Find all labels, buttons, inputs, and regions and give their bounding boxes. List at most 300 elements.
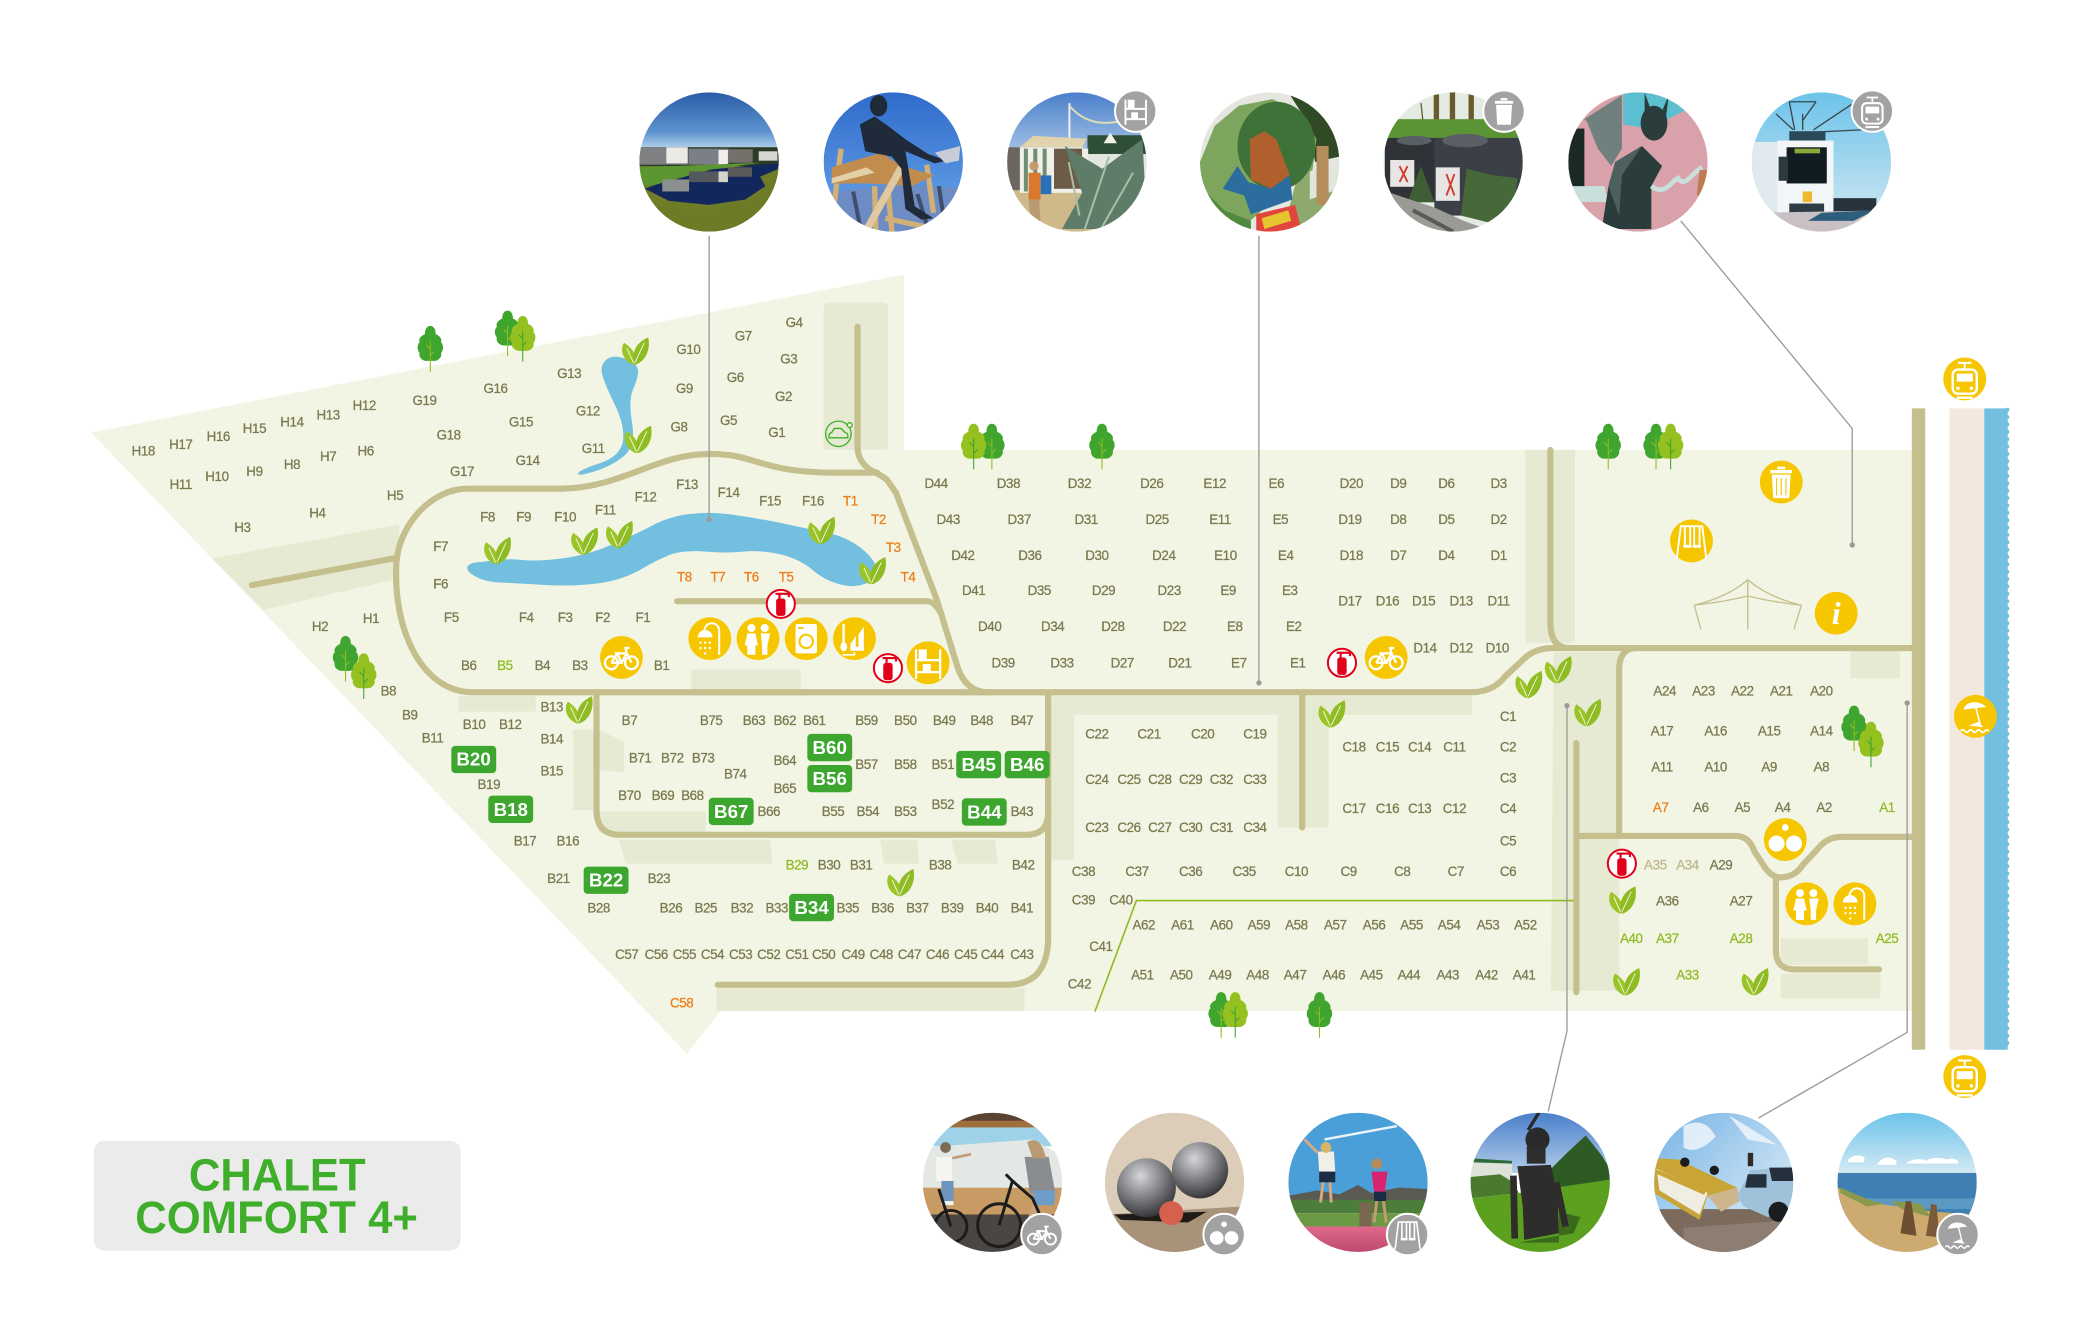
plot labels: F and T rows: T8 bbox=[677, 570, 692, 585]
plot labels: F and T rows: F14 bbox=[718, 485, 740, 500]
photo: players on trampoline bbox=[1288, 1113, 1428, 1252]
plot labels: D and E rows: E3 bbox=[1282, 583, 1298, 598]
map pointer lines bbox=[707, 221, 1909, 1118]
plot labels: D and E rows: E9 bbox=[1220, 583, 1236, 598]
title: chalet comfort 4+: CHALET bbox=[189, 1149, 366, 1200]
plot labels: D and E rows: D42 bbox=[951, 548, 975, 563]
plot labels: B row: B40 bbox=[976, 900, 998, 915]
plot labels: F and T rows: T7 bbox=[710, 570, 725, 585]
plot labels: A row: A50 bbox=[1170, 967, 1193, 982]
plot labels: B row: B75 bbox=[700, 713, 722, 728]
plot labels: C row: C12 bbox=[1443, 801, 1466, 816]
icon: tram stop north bbox=[1943, 358, 1986, 400]
plot labels: G row: G3 bbox=[780, 351, 797, 366]
plot labels: B row: B59 bbox=[855, 713, 878, 728]
plot labels: A row: A11 bbox=[1651, 760, 1673, 775]
plot labels: B row: B71 bbox=[629, 750, 651, 765]
plot labels: C row: C54 bbox=[701, 947, 725, 962]
plot labels: D and E rows: E1 bbox=[1290, 655, 1306, 670]
plot labels: A row: A28 bbox=[1730, 931, 1752, 946]
plot labels: H row bbox=[132, 398, 403, 634]
plot labels: H row: H11 bbox=[170, 477, 192, 492]
plot labels: B row: B3 bbox=[572, 658, 588, 673]
title: chalet comfort 4+: COMFORT 4+ bbox=[135, 1192, 418, 1243]
plot labels: A row: A5 bbox=[1735, 800, 1750, 815]
plot labels: G row: G15 bbox=[509, 414, 533, 429]
plot labels: B row: B42 bbox=[1012, 857, 1035, 872]
plot labels: F and T rows: F5 bbox=[444, 610, 459, 625]
plot labels: B row: B49 bbox=[933, 713, 955, 728]
panel: lakes bbox=[467, 357, 877, 586]
plot labels: F and T rows: F6 bbox=[433, 576, 448, 591]
photo: caravans by the pond bbox=[640, 92, 779, 232]
plot labels: D and E rows: D13 bbox=[1449, 594, 1473, 609]
plot labels: C row: C45 bbox=[954, 947, 977, 962]
plot labels: C row: C44 bbox=[981, 947, 1005, 962]
plot labels: D and E rows: D43 bbox=[937, 512, 960, 527]
plot labels: B row: B32 bbox=[731, 900, 753, 915]
icon: bike rental east bbox=[1365, 636, 1408, 679]
plot labels: D and E rows: D44 bbox=[924, 476, 949, 491]
plot labels: D and E rows: E12 bbox=[1203, 476, 1226, 491]
plot labels: G row: G13 bbox=[557, 366, 581, 381]
plot labels: B row bbox=[381, 658, 1035, 915]
plot labels: D and E rows: D15 bbox=[1412, 594, 1435, 609]
photo: squirrel mural bbox=[1568, 92, 1708, 232]
plot labels: B row: B12 bbox=[499, 717, 522, 732]
plot labels: G row: G1 bbox=[768, 425, 785, 440]
plot labels: B row: B5 bbox=[497, 658, 513, 673]
plot labels: B row: B15 bbox=[540, 764, 563, 779]
plot labels: C row: C47 bbox=[898, 947, 921, 962]
plot labels: A row: A22 bbox=[1731, 683, 1754, 698]
plot labels: D and E rows: D27 bbox=[1111, 655, 1134, 670]
plot labels: A row: A24 bbox=[1653, 683, 1677, 698]
plot labels: D and E rows: D36 bbox=[1018, 548, 1042, 563]
plot labels: C row bbox=[615, 709, 1517, 1010]
plot labels: F and T rows bbox=[433, 477, 916, 625]
plot labels: C row: C16 bbox=[1376, 801, 1399, 816]
plot labels: C row: C39 bbox=[1072, 892, 1095, 907]
plot labels: H row: H17 bbox=[169, 437, 192, 452]
highlighted chalet plots: B22 bbox=[589, 870, 623, 891]
plot labels: C row: C22 bbox=[1085, 726, 1109, 741]
green boundary line bbox=[1095, 901, 1574, 1012]
plot labels: C row: C4 bbox=[1500, 801, 1517, 816]
plot labels: D and E rows: E8 bbox=[1227, 619, 1243, 634]
plot labels: A row: A23 bbox=[1692, 683, 1715, 698]
plot labels: D and E rows: D24 bbox=[1152, 548, 1176, 563]
highlighted chalet plots: B44 bbox=[967, 801, 1002, 822]
plot labels: D and E rows: D14 bbox=[1413, 641, 1438, 656]
plot labels: H row: H7 bbox=[320, 449, 336, 464]
panel: campsite land bbox=[91, 274, 1913, 1054]
plot labels: A row: A25 bbox=[1876, 931, 1898, 946]
plot labels: C row: C1 bbox=[1500, 709, 1516, 724]
plot labels: D and E rows: D41 bbox=[962, 583, 985, 598]
plot labels: B row: B36 bbox=[871, 900, 894, 915]
plot labels: F and T rows: F4 bbox=[519, 610, 535, 625]
plot labels: C row: C20 bbox=[1191, 726, 1214, 741]
badge: swing bbox=[1387, 1214, 1428, 1255]
plot labels: D and E rows: D10 bbox=[1486, 641, 1509, 656]
plot labels: C row: C27 bbox=[1148, 820, 1171, 835]
plot labels: C row: C37 bbox=[1125, 864, 1149, 879]
plot labels: D and E rows: D7 bbox=[1390, 548, 1406, 563]
plot labels: B row: B53 bbox=[894, 804, 917, 819]
icon: tram stop south bbox=[1943, 1055, 1986, 1098]
plot labels: B row: B74 bbox=[724, 766, 748, 781]
plot labels: A row: A49 bbox=[1209, 967, 1231, 982]
plot labels: D and E rows: D1 bbox=[1491, 548, 1507, 563]
plot labels: G row: G9 bbox=[676, 381, 693, 396]
plot labels: B row: B73 bbox=[692, 750, 714, 765]
plot labels: C row: C56 bbox=[645, 947, 668, 962]
plot labels: A row: A60 bbox=[1210, 918, 1233, 933]
plot labels: G row: G14 bbox=[516, 453, 541, 468]
plot labels: C row: C17 bbox=[1342, 801, 1366, 816]
plot labels: F and T rows: T2 bbox=[871, 512, 886, 527]
plot labels: C row: C3 bbox=[1500, 770, 1516, 785]
plot labels: D and E rows: D25 bbox=[1145, 512, 1169, 527]
plot labels: D and E rows: D17 bbox=[1338, 594, 1362, 609]
plot labels: A row: A52 bbox=[1514, 918, 1537, 933]
highlighted chalet plots: B46 bbox=[1010, 754, 1044, 775]
plot labels: B row: B52 bbox=[932, 797, 954, 812]
plot labels: A row: A42 bbox=[1475, 967, 1498, 982]
plot labels: B row: B69 bbox=[652, 788, 674, 803]
plot labels: B row: B68 bbox=[681, 788, 704, 803]
photo: beach cabin bbox=[1007, 92, 1146, 232]
plot labels: B row: B10 bbox=[463, 717, 485, 732]
plot labels: H row: H12 bbox=[353, 398, 376, 413]
plot labels: B row: B58 bbox=[894, 757, 917, 772]
plot labels: D and E rows: D32 bbox=[1068, 476, 1091, 491]
plot labels: C row: C2 bbox=[1500, 740, 1516, 755]
plot labels: C row: C53 bbox=[729, 947, 752, 962]
highlighted chalet plots: B18 bbox=[494, 799, 528, 820]
plot labels: C row: C28 bbox=[1148, 772, 1171, 787]
highlighted chalet plots: B56 bbox=[812, 768, 847, 789]
plot labels: C row: C48 bbox=[870, 947, 893, 962]
icon: toilets bbox=[737, 617, 779, 660]
plot labels: H row: H15 bbox=[243, 421, 266, 436]
plot labels: H row: H16 bbox=[207, 429, 230, 444]
icon: dishwashing bbox=[833, 617, 876, 660]
photo: recycling bins bbox=[1383, 92, 1523, 232]
icon: bike rental bbox=[600, 636, 643, 679]
plot labels: D and E rows: D20 bbox=[1340, 476, 1363, 491]
plot labels: C row: C33 bbox=[1243, 772, 1267, 787]
plot labels: H row: H8 bbox=[284, 457, 300, 472]
icon: playground swing bbox=[1670, 520, 1713, 562]
plot labels: C row: C19 bbox=[1243, 726, 1267, 741]
plot labels: D and E rows: D30 bbox=[1085, 548, 1109, 563]
icon: beach bbox=[1954, 695, 1997, 738]
plot labels: B row: B23 bbox=[648, 871, 670, 886]
plot labels: B row: B55 bbox=[822, 804, 844, 819]
badge: tram bbox=[1852, 90, 1893, 132]
photo: bronze statue on lawn bbox=[1471, 1113, 1610, 1252]
plot labels: D and E rows: E11 bbox=[1209, 512, 1231, 527]
plot labels: C row: C57 bbox=[615, 947, 638, 962]
plot labels: C row: C6 bbox=[1500, 864, 1516, 879]
plot labels: B row: B13 bbox=[540, 699, 563, 714]
plot labels: F and T rows: T1 bbox=[843, 493, 858, 508]
photo: cyclists at map bbox=[923, 1113, 1062, 1252]
plot labels: F and T rows: T3 bbox=[886, 540, 901, 555]
plot labels: B row: B14 bbox=[540, 732, 564, 747]
leaf markers bbox=[484, 337, 1769, 996]
plot labels: D and E rows: D19 bbox=[1338, 512, 1362, 527]
plot labels: A row: A44 bbox=[1398, 967, 1421, 982]
plot labels: F and T rows: T5 bbox=[779, 570, 794, 585]
plot labels: F and T rows: F10 bbox=[554, 509, 576, 524]
icon: bunk bed bbox=[907, 641, 950, 684]
badge: beach bbox=[1937, 1214, 1979, 1255]
plot labels: B row: B29 bbox=[786, 857, 808, 872]
plot labels: C row: C18 bbox=[1342, 740, 1366, 755]
plot labels: C row: C5 bbox=[1500, 833, 1516, 848]
plot labels: D and E rows: D3 bbox=[1491, 476, 1507, 491]
plot labels: D and E rows: D21 bbox=[1168, 655, 1192, 670]
plot labels: B row: B33 bbox=[765, 900, 788, 915]
plot labels: C row: C40 bbox=[1109, 892, 1133, 907]
plot labels: F and T rows: F7 bbox=[433, 539, 448, 554]
plot labels: B row: B47 bbox=[1011, 713, 1033, 728]
plot labels: G row bbox=[413, 315, 804, 479]
plot labels: A row: A59 bbox=[1248, 918, 1270, 933]
plot labels: F and T rows: F13 bbox=[676, 477, 698, 492]
plot labels: A row: A48 bbox=[1246, 967, 1269, 982]
plot labels: D and E rows: D38 bbox=[997, 476, 1020, 491]
plot labels: D and E rows: E7 bbox=[1231, 655, 1247, 670]
plot labels: A row: A35 bbox=[1644, 857, 1667, 872]
plot labels: B row: B64 bbox=[774, 753, 797, 768]
plot labels: A row: A29 bbox=[1710, 857, 1732, 872]
plot labels: C row: C34 bbox=[1243, 820, 1268, 835]
highlighted chalet plots: B67 bbox=[714, 801, 748, 822]
plot labels: A row: A16 bbox=[1704, 724, 1727, 739]
plot labels: A row: A62 bbox=[1132, 918, 1155, 933]
plot labels: D and E rows: D28 bbox=[1101, 619, 1125, 634]
plot labels: A row: A43 bbox=[1436, 967, 1459, 982]
plot labels: C row: C8 bbox=[1394, 864, 1410, 879]
plot labels: C row: C51 bbox=[785, 947, 809, 962]
plot labels: C row: C38 bbox=[1072, 864, 1095, 879]
plot labels: H row: H2 bbox=[312, 619, 328, 634]
plot labels: A row: A56 bbox=[1363, 918, 1385, 933]
plot labels: C row: C46 bbox=[926, 947, 949, 962]
plot labels: A row: A33 bbox=[1676, 967, 1699, 982]
plot labels: G row: G10 bbox=[676, 342, 700, 357]
plot labels: F and T rows: F2 bbox=[595, 610, 610, 625]
plot labels: F and T rows: F9 bbox=[516, 509, 531, 524]
plot labels: A row: A4 bbox=[1775, 800, 1791, 815]
plot labels: B row: B41 bbox=[1011, 900, 1033, 915]
plot labels: A row: A55 bbox=[1400, 918, 1423, 933]
plot labels: H row: H3 bbox=[234, 520, 251, 535]
plot labels: C row: C52 bbox=[757, 947, 780, 962]
plot labels: H row: H4 bbox=[309, 505, 327, 520]
plot labels: B row: B50 bbox=[894, 713, 917, 728]
plot labels: H row: H13 bbox=[316, 408, 340, 423]
plot labels: G row: G6 bbox=[727, 370, 744, 385]
plot labels: G row: G17 bbox=[450, 464, 474, 479]
plot labels: H row: H9 bbox=[246, 464, 263, 479]
plot labels: C row: C15 bbox=[1376, 740, 1399, 755]
plot labels: A row bbox=[1131, 683, 1898, 982]
plot labels: C row: C24 bbox=[1085, 772, 1109, 787]
plot labels: A row: A17 bbox=[1651, 724, 1673, 739]
plot labels: B row: B62 bbox=[774, 713, 796, 728]
plot labels: A row: A54 bbox=[1438, 918, 1461, 933]
plot labels: D and E rows: D33 bbox=[1050, 655, 1074, 670]
plot labels: G row: G12 bbox=[576, 404, 600, 419]
panel: beach and sea strip bbox=[1949, 408, 2008, 1050]
plot labels: C row: C7 bbox=[1448, 864, 1464, 879]
icon: shower east bbox=[1833, 882, 1876, 925]
plot labels: A row: A47 bbox=[1284, 967, 1306, 982]
plot labels: B row: B35 bbox=[836, 900, 859, 915]
photo: dunes and sea bbox=[1838, 1113, 1977, 1252]
plot labels: B row: B30 bbox=[818, 857, 840, 872]
icon: information: i bbox=[1832, 595, 1841, 631]
plot labels: D and E rows: D22 bbox=[1163, 619, 1186, 634]
plot labels: B row: B4 bbox=[535, 658, 551, 673]
plot labels: F and T rows: F1 bbox=[635, 610, 650, 625]
plot labels: A row: A2 bbox=[1816, 800, 1832, 815]
plot labels: A row: A40 bbox=[1620, 931, 1643, 946]
plot labels: B row: B28 bbox=[587, 900, 610, 915]
plot labels: B row: B39 bbox=[941, 900, 964, 915]
plot labels: G row: G4 bbox=[786, 315, 804, 330]
roads bbox=[252, 327, 1919, 1050]
plot labels: C row: C49 bbox=[841, 947, 865, 962]
plot labels: A row: A7 bbox=[1653, 800, 1668, 815]
plot labels: D and E rows: D18 bbox=[1340, 548, 1363, 563]
plot labels: A row: A20 bbox=[1810, 683, 1833, 698]
plot labels: D and E rows: D39 bbox=[991, 655, 1015, 670]
plot labels: F and T rows: F12 bbox=[635, 489, 656, 504]
plot labels: C row: C58 bbox=[670, 995, 693, 1010]
plot labels: G row: G18 bbox=[437, 428, 461, 443]
plot labels: G row: G5 bbox=[720, 413, 737, 428]
plot labels: D and E rows: D34 bbox=[1041, 619, 1065, 634]
plot labels: C row: C10 bbox=[1285, 864, 1308, 879]
plot labels: G row: G11 bbox=[582, 441, 605, 456]
plot labels: D and E rows: E10 bbox=[1214, 548, 1237, 563]
plot labels: G row: G16 bbox=[483, 381, 508, 396]
badge: bunk bed bbox=[1115, 90, 1156, 132]
plot labels: B row: B57 bbox=[855, 757, 878, 772]
plot labels: C row: C42 bbox=[1068, 977, 1091, 992]
plot labels: A row: A46 bbox=[1323, 967, 1345, 982]
plot labels: C row: C21 bbox=[1137, 726, 1161, 741]
plot labels: D and E rows: D6 bbox=[1438, 476, 1455, 491]
title: chalet comfort 4+ bbox=[94, 1141, 461, 1251]
plot labels: D and E rows: D23 bbox=[1158, 583, 1181, 598]
plot labels: B row: B8 bbox=[381, 683, 396, 698]
plot labels: B row: B51 bbox=[932, 757, 954, 772]
plot labels: A row: A27 bbox=[1730, 894, 1752, 909]
highlighted chalet plots: B45 bbox=[962, 754, 996, 775]
plot labels: F and T rows: T6 bbox=[744, 570, 759, 585]
plot labels: D and E rows: D16 bbox=[1376, 594, 1399, 609]
plot labels: B row: B43 bbox=[1011, 804, 1033, 819]
plot labels: B row: B17 bbox=[514, 833, 536, 848]
badge: waste bin bbox=[1483, 90, 1525, 132]
plot labels: B row: B11 bbox=[422, 730, 443, 745]
plot labels: D and E rows: D29 bbox=[1092, 583, 1115, 598]
plot labels: A row: A14 bbox=[1810, 724, 1834, 739]
plot labels: A row: A6 bbox=[1693, 800, 1709, 815]
plot labels: A row: A36 bbox=[1656, 894, 1679, 909]
badge: petanque bbox=[1203, 1214, 1245, 1255]
plot labels: D and E rows: D40 bbox=[978, 619, 1001, 634]
plot labels: C row: C23 bbox=[1085, 820, 1109, 835]
plot labels: D and E rows: D4 bbox=[1438, 548, 1456, 563]
plot labels: A row: A37 bbox=[1656, 931, 1679, 946]
plot labels: A row: A8 bbox=[1814, 760, 1829, 775]
icon: toilets east bbox=[1785, 882, 1828, 925]
plot labels: A row: A34 bbox=[1676, 857, 1700, 872]
plot labels: C row: C41 bbox=[1089, 939, 1113, 954]
photo: car and overturned caravan bbox=[1654, 1113, 1793, 1252]
plot labels: B row: B6 bbox=[461, 658, 477, 673]
plot labels: G row: G7 bbox=[735, 329, 752, 344]
plot labels: C row: C9 bbox=[1341, 864, 1357, 879]
plot labels: C row: C25 bbox=[1117, 772, 1141, 787]
plot labels: F and T rows: F16 bbox=[802, 493, 824, 508]
plot labels: H row: H5 bbox=[387, 488, 403, 503]
plot labels: A row: A53 bbox=[1477, 918, 1499, 933]
highlighted chalet plots: B20 bbox=[456, 749, 491, 770]
photo: petanque balls bbox=[1105, 1113, 1244, 1252]
plot labels: C row: C30 bbox=[1179, 820, 1202, 835]
plot labels: A row: A41 bbox=[1513, 967, 1535, 982]
plot labels: F and T rows: F3 bbox=[558, 610, 573, 625]
plot labels: C row: C13 bbox=[1408, 801, 1431, 816]
highlighted chalet plots: B34 bbox=[794, 897, 829, 918]
plot labels: D and E rows bbox=[924, 476, 1510, 670]
plot labels: C row: C50 bbox=[812, 947, 835, 962]
plot labels: C row: C32 bbox=[1210, 772, 1233, 787]
plot labels: D and E rows: E2 bbox=[1286, 619, 1302, 634]
plot labels: B row: B61 bbox=[803, 713, 826, 728]
plot labels: A row: A10 bbox=[1704, 760, 1727, 775]
trees bbox=[333, 311, 1884, 1038]
plot labels: G row: G2 bbox=[775, 389, 792, 404]
plot labels: B row: B48 bbox=[970, 713, 993, 728]
plot labels: D and E rows: E5 bbox=[1273, 512, 1288, 527]
photo: coastal tram bbox=[1752, 92, 1891, 232]
icon: event tent bbox=[1694, 580, 1801, 629]
plot labels: B row: B19 bbox=[478, 777, 500, 792]
plot labels: D and E rows: D8 bbox=[1390, 512, 1406, 527]
plot labels: D and E rows: D26 bbox=[1140, 476, 1163, 491]
plot labels: B row: B7 bbox=[622, 713, 637, 728]
plot labels: C row: C11 bbox=[1443, 740, 1466, 755]
plot labels: B row: B65 bbox=[774, 781, 796, 796]
plot labels: H row: H18 bbox=[132, 444, 155, 459]
plot labels: B row: B26 bbox=[660, 900, 682, 915]
plot labels: D and E rows: D9 bbox=[1390, 476, 1406, 491]
fire extinguishers bbox=[767, 590, 1636, 878]
plot labels: C row: C43 bbox=[1010, 947, 1034, 962]
photo: sculpture on wooden chair bbox=[824, 92, 963, 232]
plot labels: D and E rows: D2 bbox=[1491, 512, 1507, 527]
